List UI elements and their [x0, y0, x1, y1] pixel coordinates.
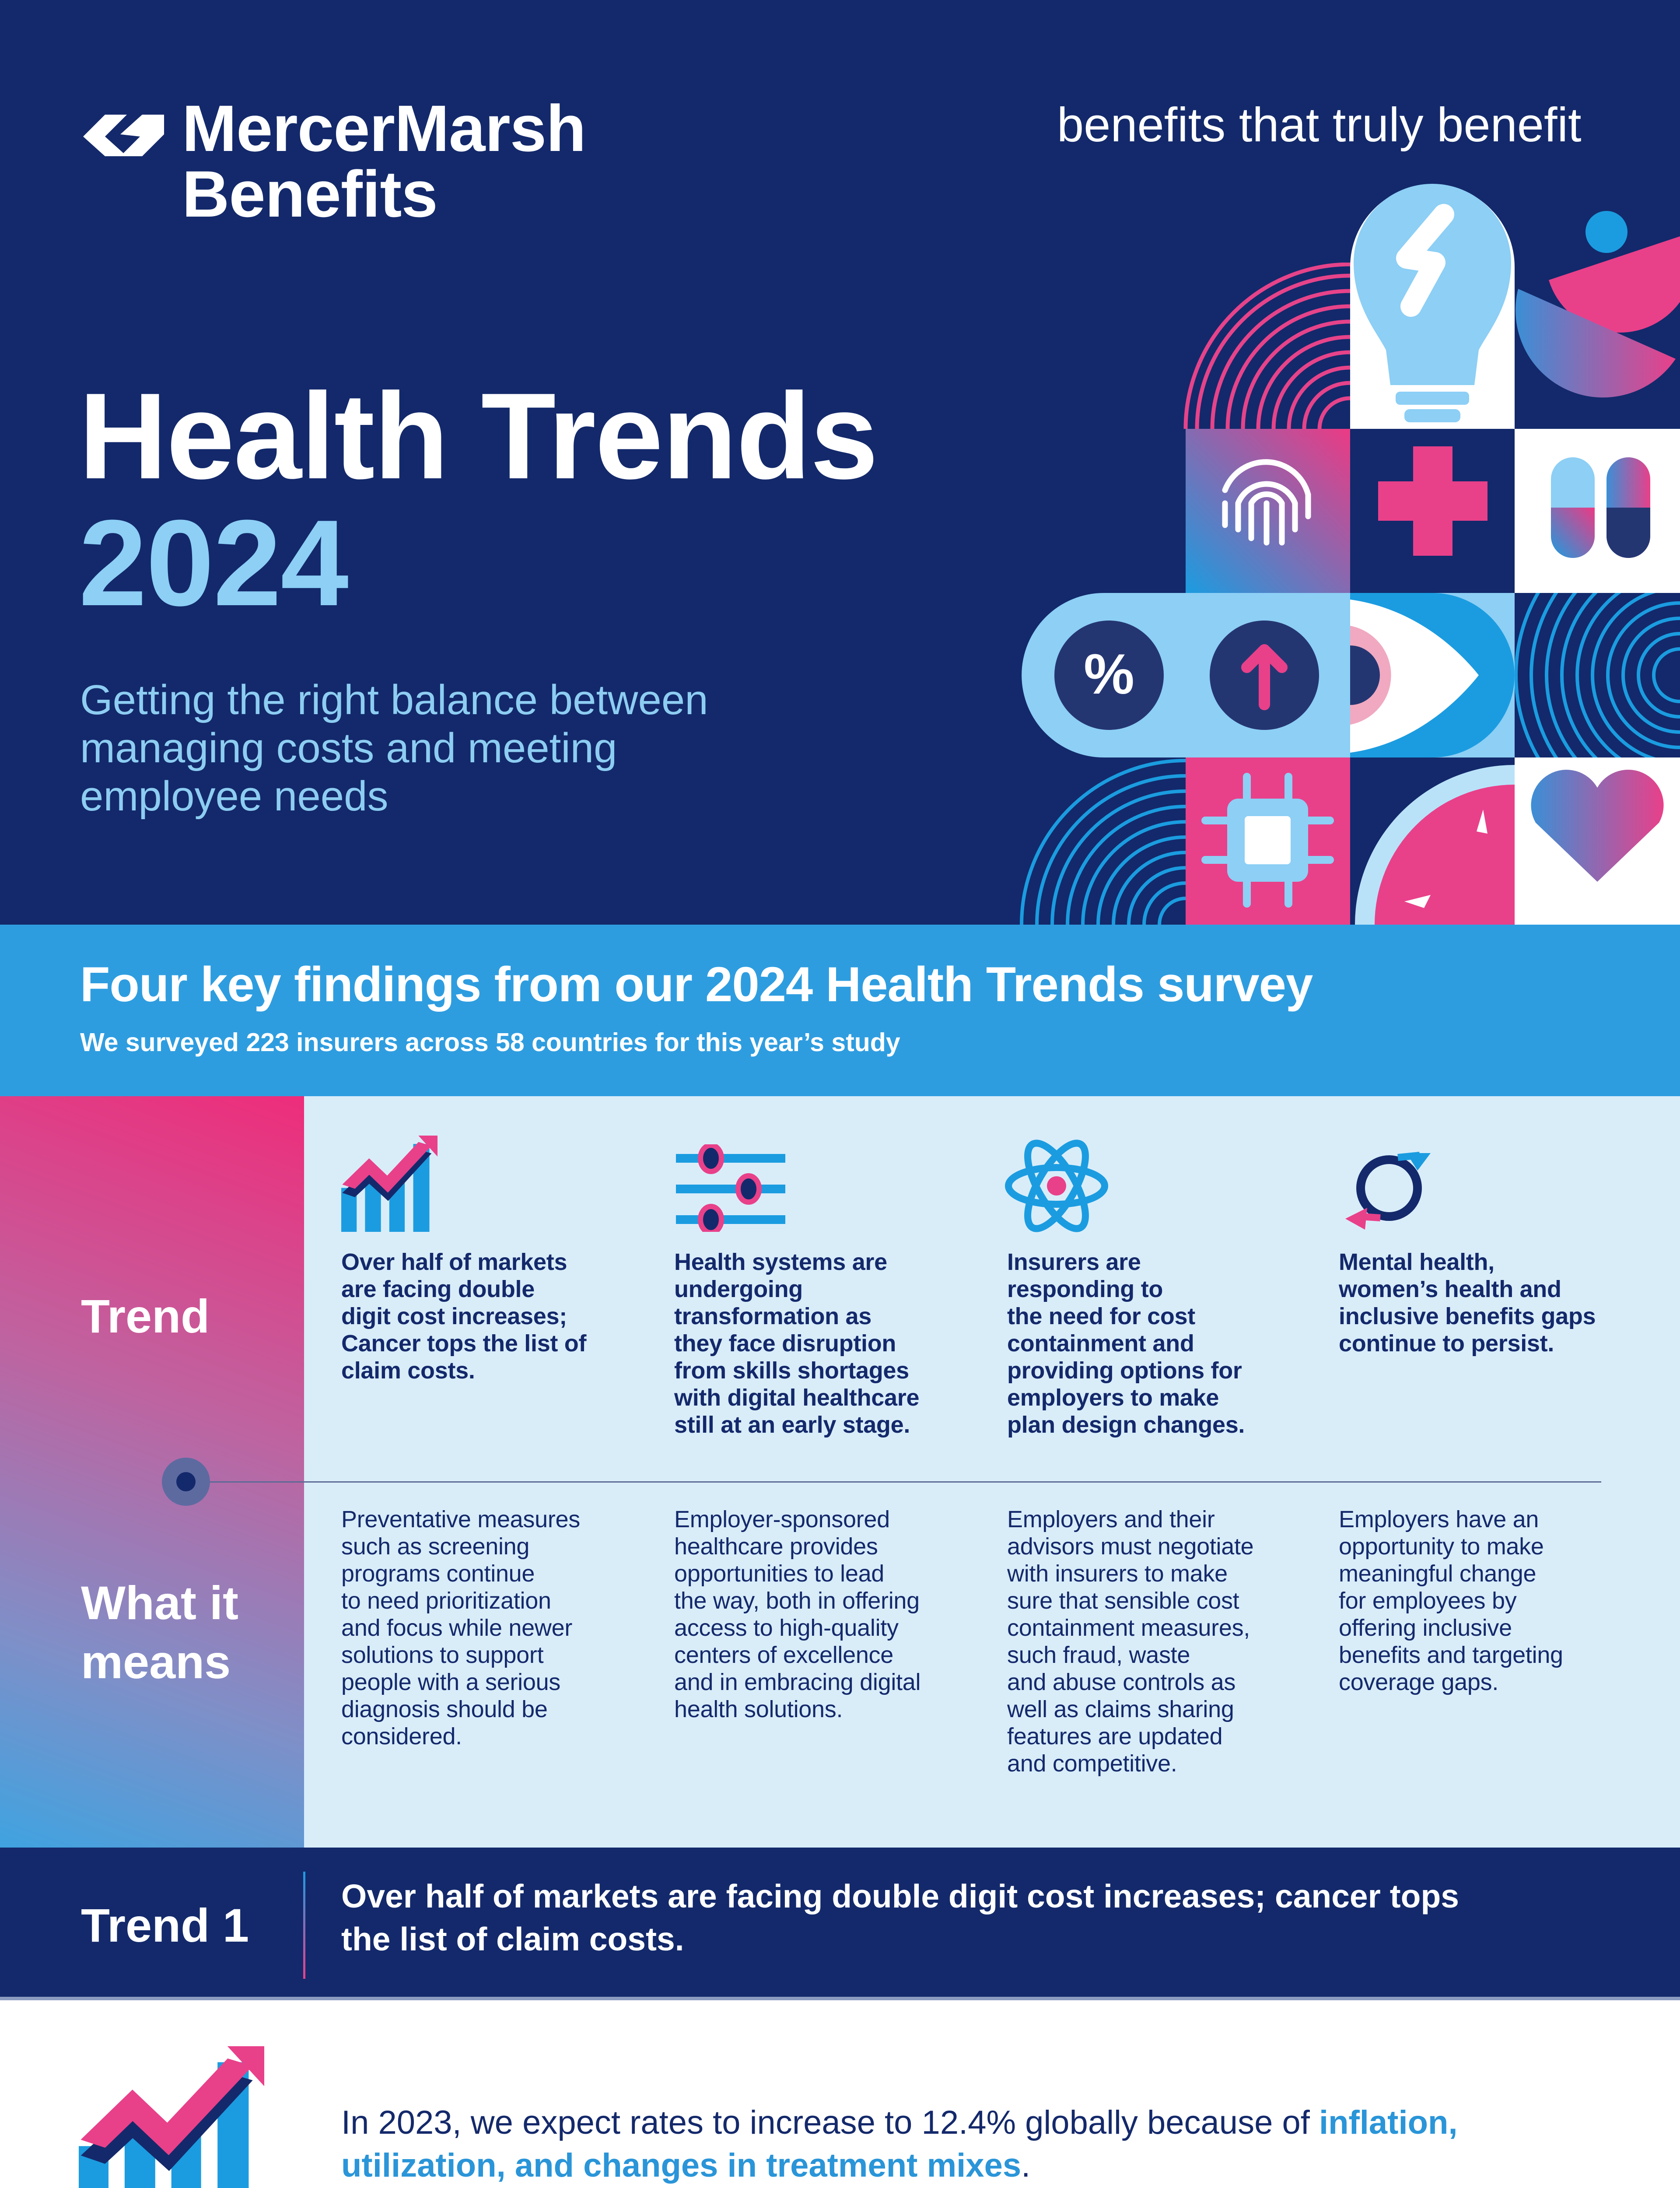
- band subheading: We surveyed 223 insurers across 58 countries for this year’s study: [80, 1028, 900, 1057]
- column 4 text: Mental health,: [1339, 1249, 1494, 1275]
- title: Health Trends: [79, 368, 878, 505]
- icon: growth chart: [341, 1136, 438, 1232]
- Trend 1 statement: the list of claim costs.: [341, 1921, 684, 1957]
- pill capsule with % and arrow: [1022, 593, 1515, 757]
- column 3 text: containment and: [1007, 1330, 1194, 1357]
- eye: [1350, 593, 1515, 757]
- column 1 text: people with a serious: [341, 1669, 560, 1695]
- column 1 text: are facing double: [341, 1276, 535, 1302]
- column 1 text: considered.: [341, 1723, 462, 1750]
- column 3 text: such fraud, waste: [1007, 1642, 1190, 1668]
- icon: sliders: [676, 1144, 785, 1232]
- column 4 text: meaningful change: [1339, 1560, 1536, 1587]
- chip cell: [1186, 757, 1350, 925]
- column 4 text: coverage gaps.: [1339, 1669, 1498, 1695]
- bottom statement: utilization, and changes in treatment mixes.: [341, 2147, 1030, 2184]
- label: What it means: means: [81, 1635, 231, 1688]
- abstract figure top right: [1516, 211, 1680, 397]
- column 4 text: [1339, 1248, 1662, 1747]
- column 3 text: responding to: [1007, 1276, 1163, 1302]
- icon: bottom growth chart: [79, 2046, 264, 2188]
- column 1 text: Preventative measures: [341, 1506, 580, 1532]
- column 2 text: transformation as: [674, 1303, 872, 1329]
- column 4 text: inclusive benefits gaps: [1339, 1303, 1596, 1329]
- column 1 text: diagnosis should be: [341, 1696, 548, 1722]
- column 4 text: offering inclusive: [1339, 1615, 1512, 1641]
- column 1 text: claim costs.: [341, 1357, 475, 1384]
- title: 2024: [79, 495, 348, 631]
- column 2 text: Employer-sponsored: [674, 1506, 890, 1532]
- column 2 text: from skills shortages: [674, 1357, 909, 1384]
- pills cell: [1515, 429, 1680, 593]
- Trend 1 bar: [0, 1848, 1680, 2000]
- bottom statement: In 2023, we expect rates to increase to 12.4% globally because of inflation,: [341, 2104, 1458, 2141]
- column 4 text: continue to persist.: [1339, 1330, 1554, 1357]
- column 2 text: still at an early stage.: [674, 1412, 910, 1438]
- bottom statement: [341, 2101, 1654, 2187]
- column 1 text: Over half of markets: [341, 1249, 567, 1275]
- logo: MercerMarsh: [182, 91, 586, 165]
- column 1 text: digit cost increases;: [341, 1303, 567, 1329]
- column 1 text: solutions to support: [341, 1642, 543, 1668]
- navy cell with pink cross: [1350, 429, 1515, 593]
- pill capsule with % and arrow: %: [1084, 642, 1134, 706]
- blue arcs bottom left: [1020, 759, 1186, 925]
- column 3 text: with insurers to make: [1007, 1560, 1228, 1587]
- Trend 1 statement: Over half of markets are facing double digit cost increases; cancer tops: [341, 1878, 1459, 1914]
- column 3 text: advisors must negotiate: [1007, 1533, 1253, 1560]
- icon: logo mark: [79, 110, 166, 161]
- column 3 text: employers to make: [1007, 1385, 1219, 1411]
- column 3 text: plan design changes.: [1007, 1412, 1245, 1438]
- pink arcs: [1184, 263, 1350, 429]
- column 2 text: opportunities to lead: [674, 1560, 884, 1587]
- hero illustration: [1006, 175, 1680, 925]
- column 3 text: features are updated: [1007, 1723, 1222, 1750]
- column 4 text: benefits and targeting: [1339, 1642, 1563, 1668]
- divider with dot: [162, 1458, 1601, 1506]
- column 2 text: access to high-quality: [674, 1615, 899, 1641]
- icon: cycle arrows: [1341, 1140, 1433, 1232]
- subtitle: employee needs: [80, 773, 388, 820]
- blue arcs right: [1515, 593, 1680, 757]
- column 3 text: Insurers are: [1007, 1249, 1141, 1275]
- column 2 text: and in embracing digital: [674, 1669, 920, 1695]
- heart cell: [1515, 757, 1680, 925]
- column 4 text: Employers have an: [1339, 1506, 1539, 1532]
- findings table: [0, 1096, 1680, 1848]
- column 2 text: Health systems are: [674, 1249, 887, 1275]
- icon: atom: [1004, 1131, 1109, 1241]
- column 3 text: containment measures,: [1007, 1615, 1250, 1641]
- pink quarter disc: [1355, 765, 1515, 925]
- column 3 text: and abuse controls as: [1007, 1669, 1236, 1695]
- lightbulb cell: [1350, 184, 1515, 429]
- label: Trend: Trend: [81, 1290, 210, 1343]
- column 2 text: health solutions.: [674, 1696, 843, 1722]
- column 3 text: well as claims sharing: [1007, 1696, 1234, 1722]
- fingerprint cell: [1186, 429, 1350, 593]
- label: What it means: [81, 1573, 238, 1691]
- subtitle: managing costs and meeting: [80, 725, 617, 771]
- left gradient column: [0, 1096, 304, 1848]
- column 1 text: programs continue: [341, 1560, 535, 1587]
- column 3 text: the need for cost: [1007, 1303, 1195, 1329]
- column 3 text: providing options for: [1007, 1357, 1242, 1384]
- column 1 text: Cancer tops the list of: [341, 1330, 586, 1357]
- column 1 text: [341, 1248, 648, 1747]
- header: dark navy background: [0, 0, 1680, 925]
- column 3 text: [1007, 1248, 1313, 1747]
- column 4 text: women’s health and: [1339, 1276, 1561, 1302]
- column 2 text: [674, 1248, 980, 1747]
- logo: [79, 105, 626, 232]
- band: four key findings: [0, 925, 1680, 1096]
- label: What it means: What it: [81, 1576, 238, 1629]
- Trend 1 label: Trend 1: [81, 1899, 249, 1952]
- column 2 text: they face disruption: [674, 1330, 896, 1357]
- column 2 text: healthcare provides: [674, 1533, 878, 1560]
- column 4 text: for employees by: [1339, 1588, 1516, 1614]
- logo: Benefits: [182, 157, 438, 231]
- column 2 text: with digital healthcare: [674, 1385, 919, 1411]
- column 1 text: and focus while newer: [341, 1615, 572, 1641]
- title: [79, 373, 1085, 627]
- tagline: benefits that truly benefit: [1057, 98, 1582, 152]
- column 1 text: to need prioritization: [341, 1588, 551, 1614]
- column 3 text: Employers and their: [1007, 1506, 1215, 1532]
- Trend 1 statement: [341, 1875, 1654, 1960]
- column 2 text: the way, both in offering: [674, 1588, 920, 1614]
- subtitle: [80, 676, 955, 820]
- findings table: and competitive.: [1007, 1750, 1177, 1777]
- column 3 text: sure that sensible cost: [1007, 1588, 1239, 1614]
- subtitle: Getting the right balance between: [80, 677, 708, 723]
- column 1 text: such as screening: [341, 1533, 529, 1560]
- column 2 text: undergoing: [674, 1276, 803, 1302]
- band heading: Four key findings from our 2024 Health Trends survey: [80, 957, 1312, 1012]
- column 2 text: centers of excellence: [674, 1642, 893, 1668]
- column 4 text: opportunity to make: [1339, 1533, 1544, 1560]
